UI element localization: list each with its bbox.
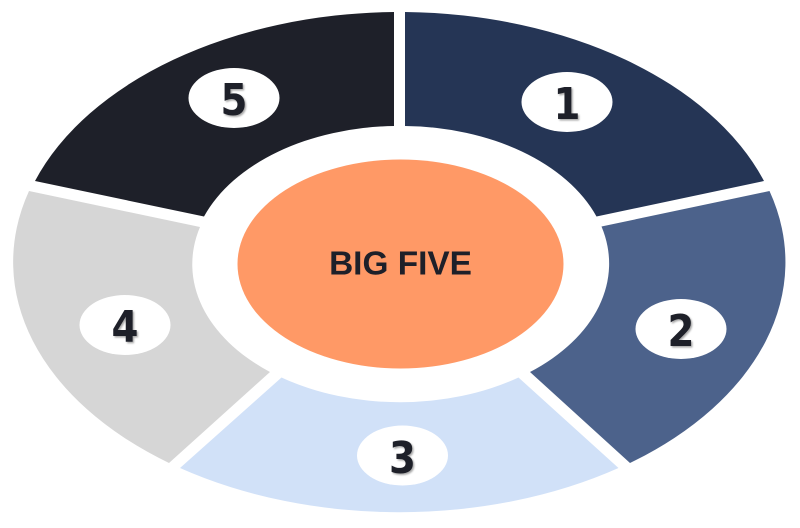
segment 1: dark navy [405, 12, 764, 216]
segment 3: pale blue: 3 [389, 433, 416, 484]
center ellipse: BIG FIVE: BIG FIVE [329, 246, 472, 282]
center ellipse: BIG FIVE [238, 160, 564, 368]
segment 1: dark navy: 1 [554, 79, 580, 130]
segment 2: slate blue [530, 191, 785, 463]
segment 5: near black: 5 [221, 75, 247, 126]
segment 3: pale blue [180, 378, 618, 512]
segment 4: light grey: 4 [112, 302, 138, 353]
segment 2: slate blue: 2 [668, 306, 694, 357]
segment 5: near black [35, 12, 394, 216]
segment 4: light grey [13, 191, 270, 463]
